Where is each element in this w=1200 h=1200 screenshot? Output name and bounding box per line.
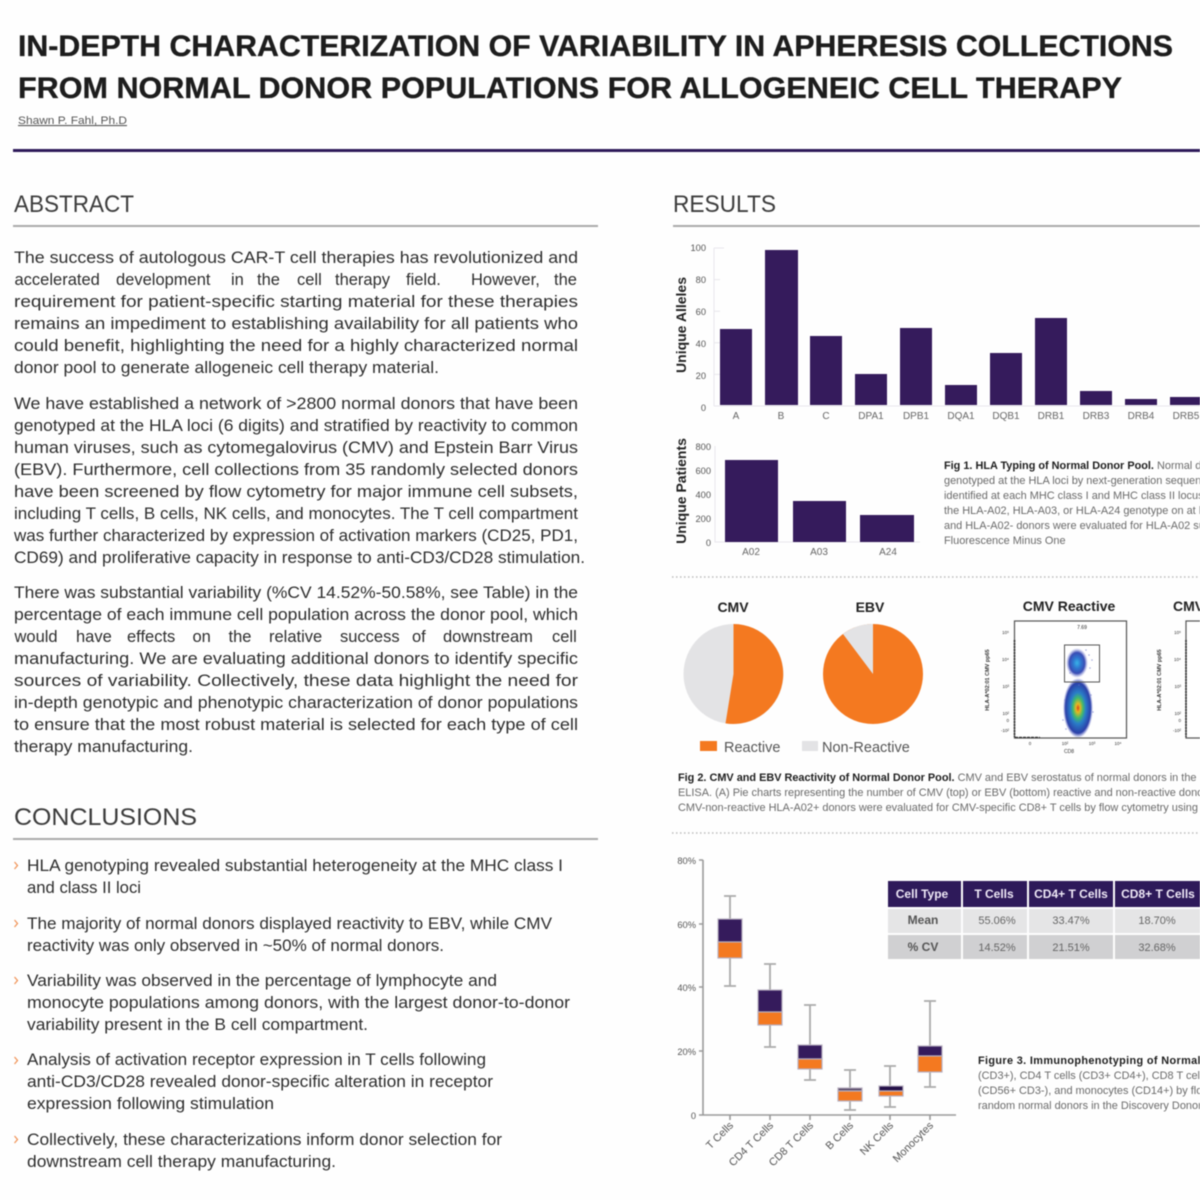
bar chart: unique patients: 0: [706, 538, 711, 548]
abstract text: on: [192, 628, 211, 646]
heading: results: RESULTS: [673, 191, 776, 218]
caption: figure 3: [978, 1055, 1200, 1112]
abstract text: success: [340, 628, 400, 646]
pie chart: EBV: [823, 599, 923, 724]
title: [18, 30, 1173, 105]
abstract text: relative: [269, 628, 322, 646]
abstract text: therapy manufacturing.: [14, 738, 193, 756]
caption: figure 2: [678, 772, 1200, 814]
table: cell type statistics: 14.52%: [978, 942, 1016, 954]
bullet list: reactivity was only observed in ~50% of normal donors.: [27, 937, 444, 955]
abstract text: could benefit, highlighting the need for a highly characterized normal: [14, 337, 578, 355]
abstract text: [13, 249, 585, 756]
abstract text: There was substantial variability (%CV 14.52%-50.58%, see Table) in the: [14, 584, 578, 602]
box plot: immune cell populations: Monocytes: [891, 1119, 937, 1165]
flow plot: CMV reactive: HLA-A*02:01 CMV pp65: [985, 649, 991, 711]
bar chart: unique alleles: C: [822, 411, 830, 422]
abstract text: development: [116, 271, 211, 289]
abstract text: the: [228, 628, 251, 646]
pie chart: EBV: EBV: [856, 599, 885, 615]
bar chart: unique alleles: DQA1: [947, 411, 975, 422]
table: cell type statistics: CD4+ T Cells: [1034, 887, 1108, 901]
abstract text: CD69) and proliferative capacity in response to anti-CD3/CD28 stimulation.: [14, 549, 585, 567]
flow plot: CMV reactive: CMV Reactive: [1023, 598, 1116, 614]
flow plot: CMV reactive: 7.69: [1077, 625, 1087, 631]
flow plot: CMV reactive: 10²: [1062, 741, 1069, 746]
caption: figure 2: ELISA. (A) Pie charts representing the number of CMV (top) or EBV (bottom) reactive and non-reactive donors: [678, 787, 1200, 799]
caption: figure 2: Fig 2. CMV and EBV Reactivity of Normal Donor Pool. CMV and EBV serostatus of normal donors in the: [678, 772, 1197, 784]
abstract text: (EBV). Furthermore, cell collections from 35 randomly selected donors: [14, 461, 578, 479]
abstract text: have: [76, 628, 112, 646]
bar chart: unique alleles: DRB4: [1128, 411, 1155, 422]
box plot: immune cell populations: 80%: [677, 856, 696, 866]
abstract text: genotyped at the HLA loci (6 digits) and stratified by reactivity to common: [14, 417, 578, 435]
abstract text: have been screened by flow cytometry for major immune cell subsets,: [14, 483, 578, 501]
bar chart: unique patients: 800: [695, 442, 711, 452]
bar chart: unique alleles: 20: [696, 371, 706, 381]
bar chart: unique alleles: 80: [696, 275, 706, 285]
table: cell type statistics: [888, 881, 1200, 959]
table: cell type statistics: Cell Type: [896, 887, 949, 901]
bar chart: unique patients: Unique Patients: [673, 438, 689, 544]
bullet list: Variability was observed in the percentage of lymphocyte and: [27, 972, 497, 990]
table: cell type statistics: 55.06%: [978, 915, 1016, 927]
bar chart: unique alleles: DPB1: [903, 411, 929, 422]
abstract text: the: [554, 271, 577, 289]
bullet list: downstream cell therapy manufacturing.: [27, 1153, 336, 1171]
abstract text: was further characterized by expression of activation markers (CD25, PD1,: [13, 527, 578, 545]
table: cell type statistics: T Cells: [974, 887, 1014, 901]
bar chart: unique patients: A03: [810, 547, 828, 558]
bar chart: unique alleles: 0: [701, 403, 706, 413]
bar chart: unique alleles: DQB1: [992, 411, 1020, 422]
bar chart: unique alleles: DRB1: [1038, 411, 1065, 422]
author: Shawn P. Fahl, Ph.D: [18, 115, 127, 127]
abstract text: We have established a network of >2800 normal donors that have been: [14, 395, 578, 413]
abstract text: including T cells, B cells, NK cells, and monocytes. The T cell compartment: [14, 505, 578, 523]
bullet list: and class II loci: [27, 879, 141, 897]
flow plot: CMV reactive: 10³: [1002, 684, 1009, 689]
heading: abstract: ABSTRACT: [14, 191, 134, 218]
box plot: immune cell populations: CD4 T Cells: [727, 1119, 777, 1169]
abstract text: of: [412, 628, 426, 646]
flow plot: CMV non-reactive: 0: [1178, 718, 1181, 723]
box plot: immune cell populations: 0: [691, 1111, 696, 1121]
flow plot: CMV reactive: 10²: [1002, 711, 1009, 716]
box plot: immune cell populations: NK Cells: [858, 1119, 897, 1158]
abstract text: in: [231, 271, 244, 289]
bullet list: Collectively, these characterizations inform donor selection for: [27, 1131, 503, 1149]
flow plot: CMV reactive: 10³: [1089, 741, 1096, 746]
abstract text: sources of variability. Collectively, these data highlight the need for: [14, 672, 579, 690]
bar chart: unique patients: A24: [879, 547, 897, 558]
abstract text: in-depth genotypic and phenotypic characterization of donor populations: [14, 694, 578, 712]
bar chart: unique alleles: B: [778, 411, 785, 422]
bullet list: [14, 857, 571, 1171]
abstract text: downstream: [443, 628, 533, 646]
box plot: immune cell populations: [677, 856, 956, 1169]
bullet list: expression following stimulation: [27, 1095, 274, 1113]
legend: Reactive: [724, 740, 780, 756]
abstract text: donor pool to generate allogeneic cell therapy material.: [14, 359, 439, 377]
flow plot: CMV non-reactive: HLA-A*02:01 CMV pp65: [1157, 649, 1163, 711]
bar chart: unique alleles: 100: [690, 243, 706, 253]
title: FROM NORMAL DONOR POPULATIONS FOR ALLOGENEIC CELL THERAPY: [18, 72, 1122, 105]
bar chart: unique patients: [673, 438, 920, 558]
caption: figure 1: [944, 460, 1200, 547]
caption: figure 2: CMV-non-reactive HLA-A02+ donors were evaluated for CMV-specific CD8+ T cells by flow cytometry using: [678, 802, 1198, 814]
bar chart: unique alleles: 60: [696, 307, 706, 317]
box plot: immune cell populations: CD8 T Cells: [767, 1119, 817, 1169]
flow plot: CMV non-reactive: 10³: [1174, 684, 1181, 689]
bar chart: unique patients: 600: [695, 466, 711, 476]
bar chart: unique alleles: A: [733, 411, 740, 422]
pie chart: CMV: CMV: [717, 599, 749, 615]
bullet list: HLA genotyping revealed substantial heterogeneity at the MHC class I: [27, 857, 563, 875]
abstract text: human viruses, such as cytomegalovirus (CMV) and Epstein Barr Virus: [14, 439, 578, 457]
legend: [700, 740, 910, 756]
bar chart: unique alleles: 40: [696, 339, 706, 349]
flow plot: CMV reactive: 10⁵: [1002, 630, 1009, 635]
table: cell type statistics: Mean: [908, 913, 938, 927]
bullet list: The majority of normal donors displayed reactivity to EBV, while CMV: [27, 915, 552, 933]
flow plot: CMV reactive: [985, 598, 1126, 755]
bar chart: unique patients: 200: [695, 514, 711, 524]
flow plot: CMV non-reactive: 10⁵: [1174, 630, 1181, 635]
abstract text: accelerated: [14, 271, 100, 289]
table: cell type statistics: 32.68%: [1138, 942, 1176, 954]
box plot: immune cell populations: B Cells: [823, 1119, 857, 1152]
abstract text: The success of autologous CAR-T cell therapies has revolutionized and: [14, 249, 578, 267]
abstract text: therapy: [335, 271, 391, 289]
flow plot: CMV non-reactive: [1157, 598, 1200, 738]
panel: conclusions: [13, 804, 598, 1171]
bullet list: Analysis of activation receptor expression in T cells following: [27, 1051, 486, 1069]
abstract text: would: [14, 628, 58, 646]
caption: figure 1: identified at each MHC class I and MHC class II locus: [944, 490, 1200, 502]
flow plot: CMV non-reactive: 10²: [1174, 711, 1181, 716]
panel: abstract: [13, 191, 598, 756]
bullet list: anti-CD3/CD28 revealed donor-specific alteration in receptor: [27, 1073, 494, 1091]
abstract text: effects: [127, 628, 175, 646]
abstract text: to ensure that the most robust material is selected for each type of cell: [14, 716, 578, 734]
bar chart: unique patients: 400: [695, 490, 711, 500]
bullet list: monocyte populations among donors, with the largest donor-to-donor: [27, 994, 571, 1012]
pie chart: CMV: [684, 599, 784, 724]
box plot: immune cell populations: T Cells: [704, 1119, 737, 1152]
caption: figure 1: Fluorescence Minus One: [944, 535, 1066, 547]
abstract text: requirement for patient-specific starting material for these therapies: [14, 293, 578, 311]
bar chart: unique alleles: DRB3: [1083, 411, 1110, 422]
table: cell type statistics: 18.70%: [1138, 915, 1176, 927]
abstract text: However,: [471, 271, 540, 289]
abstract text: cell: [552, 628, 577, 646]
flow plot: CMV non-reactive: 10⁴: [1174, 657, 1181, 662]
abstract text: remains an impediment to establishing availability for all patients who: [14, 315, 578, 333]
bar chart: unique patients: A02: [742, 547, 760, 558]
bar chart: unique alleles: DRB5: [1173, 411, 1200, 422]
legend: Non-Reactive: [822, 740, 910, 756]
flow plot: CMV reactive: 0: [1006, 718, 1009, 723]
table: cell type statistics: CD8+ T Cells: [1121, 887, 1195, 901]
bar chart: unique alleles: [673, 243, 1200, 422]
flow plot: CMV reactive: 10⁴: [1002, 657, 1009, 662]
flow plot: CMV reactive: 10⁴: [1115, 741, 1122, 746]
box plot: immune cell populations: 20%: [677, 1047, 696, 1057]
table: cell type statistics: % CV: [908, 940, 938, 954]
bullet list: variability present in the B cell compartment.: [27, 1016, 368, 1034]
flow plot: CMV non-reactive: -10²: [1173, 728, 1181, 733]
header rule: [13, 149, 1200, 152]
abstract text: cell: [297, 271, 322, 289]
heading: conclusions: CONCLUSIONS: [14, 804, 197, 831]
abstract text: field.: [406, 271, 441, 289]
abstract text: percentage of each immune cell population across the donor pool, which: [14, 606, 578, 624]
flow plot: CMV reactive: CD8: [1064, 749, 1074, 755]
title: IN-DEPTH CHARACTERIZATION OF VARIABILITY IN APHERESIS COLLECTIONS: [18, 30, 1173, 63]
abstract text: the: [257, 271, 280, 289]
table: cell type statistics: 33.47%: [1052, 915, 1090, 927]
flow plot: CMV reactive: 0: [1029, 741, 1032, 746]
table: cell type statistics: 21.51%: [1052, 942, 1090, 954]
box plot: immune cell populations: 40%: [677, 983, 696, 993]
bar chart: unique alleles: Unique Alleles: [673, 277, 689, 373]
bar chart: unique alleles: DPA1: [858, 411, 884, 422]
box plot: immune cell populations: 60%: [677, 920, 696, 930]
flow plot: CMV reactive: -10²: [1001, 728, 1009, 733]
abstract text: manufacturing. We are evaluating additional donors to identify specific: [14, 650, 578, 668]
